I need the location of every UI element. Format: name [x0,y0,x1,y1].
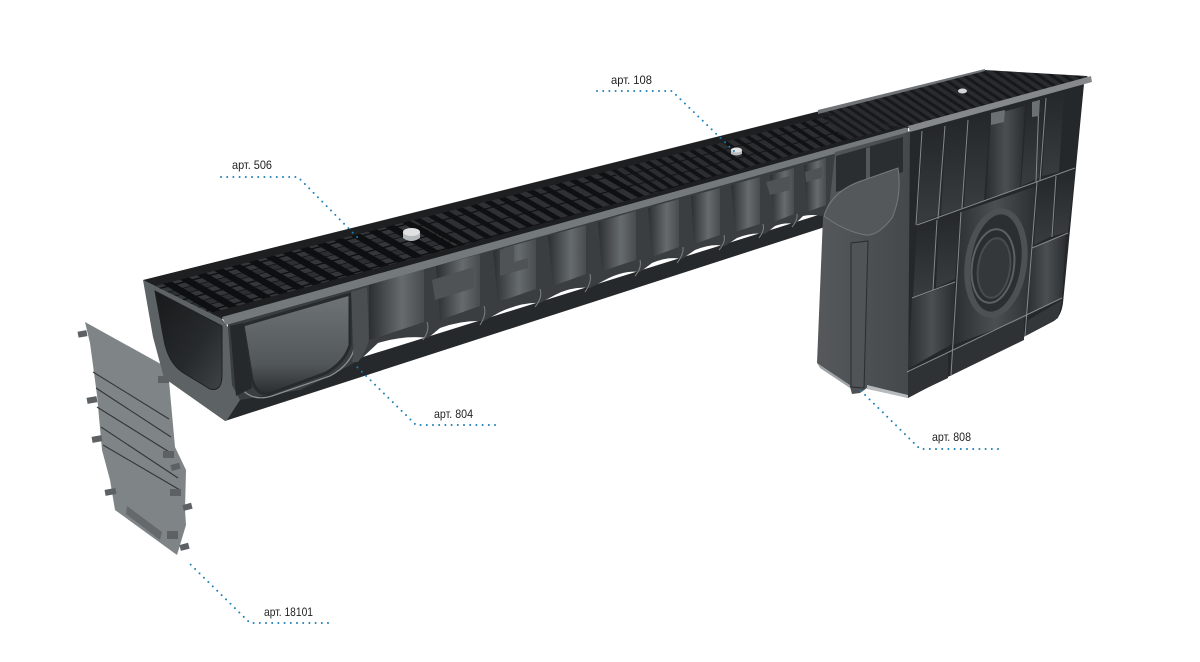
pipe socket [961,208,1031,318]
bolt on channel grating [403,228,420,241]
end rib [230,323,252,396]
bays [369,158,826,340]
basin left side [817,130,912,398]
leader art. 108 [597,91,738,155]
rib lines [907,98,1075,375]
leader art. 808 [858,388,998,449]
leader art. 18101 [188,562,328,623]
end cap plate art. 18101 [78,322,193,555]
basin grating [818,70,1090,128]
label art. 804: арт. 804 [434,407,473,421]
channel rim [222,127,908,325]
channel end opening [155,291,222,389]
upper lugs [991,110,1005,125]
label art. 18101: арт. 18101 [264,605,313,619]
first bay lip [241,345,355,398]
basin ribbed face [908,84,1084,398]
channel art. 804 body [143,148,835,421]
leader art. 804 [354,364,495,425]
side arc [824,168,899,235]
leader art. 506 [221,177,360,240]
channel grating art. 506 / 108 [143,111,908,319]
lugs [432,167,822,300]
basin grating rim [908,76,1092,132]
label art. 108: арт. 108 [611,73,652,87]
basin foot [817,363,850,388]
cells [908,93,1075,397]
inner connection divider [866,147,870,182]
channel side wall [228,148,835,402]
channel end face [143,280,240,421]
channel bottom rail [225,212,828,421]
basin art. 808 [817,69,1092,398]
vertical channel [851,241,868,388]
bolt on basin grating [958,88,967,94]
bolt on second grating [731,148,742,156]
inner connection opening [836,137,903,192]
first bay [243,294,350,394]
label art. 808: арт. 808 [932,430,971,444]
rib 1 [351,287,369,362]
rib lines [423,214,797,340]
label art. 506: арт. 506 [232,158,272,172]
